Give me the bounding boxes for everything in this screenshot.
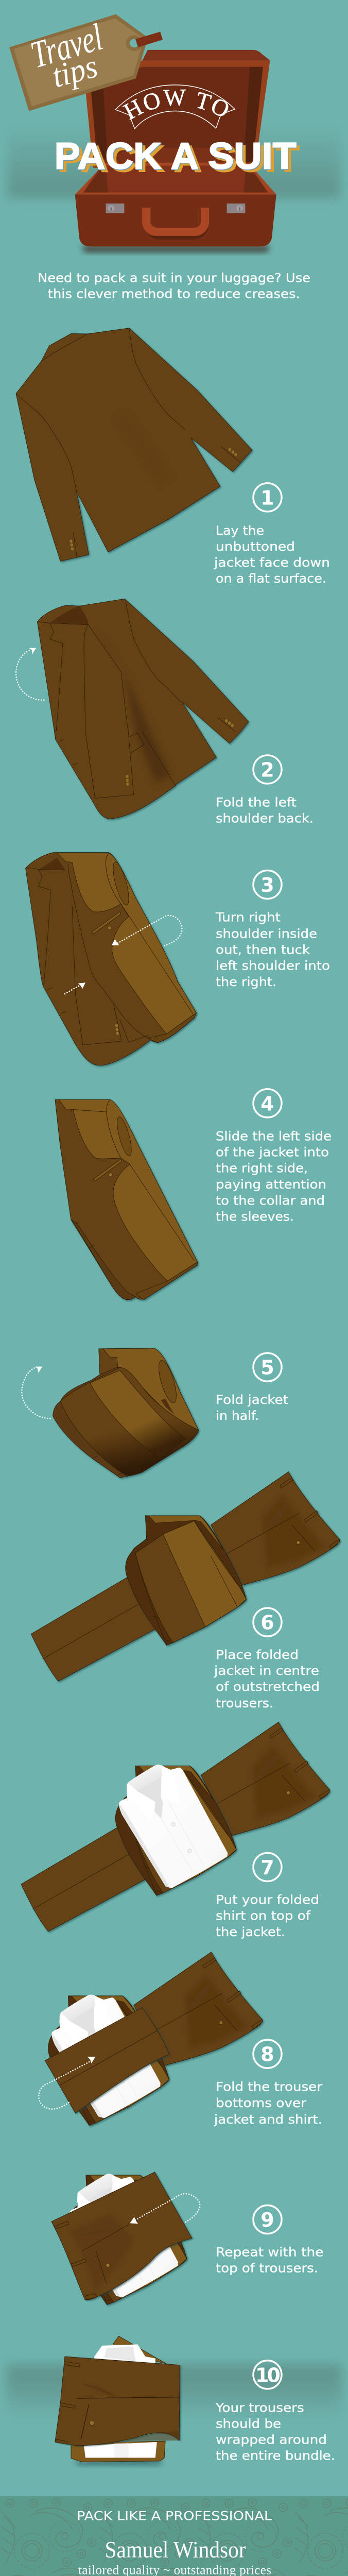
step 6 text: jacket in centre	[214, 1664, 319, 1678]
step 4 text: 4	[260, 1092, 274, 1115]
step 9 text: top of trousers.	[216, 2261, 318, 2276]
step 1 text: on a flat surface.	[216, 571, 326, 586]
step 3 text: left shoulder into	[216, 959, 330, 973]
step 10 text: Your trousers	[215, 2401, 304, 2415]
step 9 text: 9	[260, 2209, 274, 2231]
footer: Samuel Windsor	[0, 2496, 348, 2576]
step 4 text: Slide the left side	[216, 1129, 332, 1143]
banner: how to: HOW TO	[123, 90, 229, 121]
jacket step 3	[26, 853, 197, 1065]
luggage tag: travel tips: tips	[48, 47, 101, 95]
title: pack a suit: PACK A SUIT	[58, 139, 300, 180]
intro text: this clever method to reduce creases.	[48, 286, 300, 301]
step 6 text	[214, 1608, 320, 1710]
step 4 text: the sleeves.	[216, 1210, 294, 1224]
arrow: fold in half	[22, 1367, 50, 1418]
step 10 text: the entire bundle.	[216, 2449, 335, 2463]
step 6 text: of outstretched	[216, 1680, 320, 1694]
step 4 text: to the collar and	[216, 1193, 325, 1208]
step 6 text: 6	[260, 1612, 274, 1634]
step 10 text: should be	[216, 2417, 281, 2431]
icon: right latch	[227, 204, 245, 213]
step 4 text: of the jacket into	[216, 1145, 329, 1159]
trousers with jacket step 6	[31, 1472, 340, 1681]
step 5 text	[216, 1353, 288, 1423]
jacket step 2	[16, 599, 249, 819]
bundle step 10	[55, 2336, 180, 2466]
luggage tag: travel tips	[9, 14, 163, 111]
step 8 text: 8	[260, 2043, 274, 2066]
jacket step 1	[16, 328, 252, 561]
step 8 text: bottoms over	[216, 2096, 306, 2110]
step 6 text: trousers.	[216, 1696, 273, 1710]
bundle step 8	[39, 1952, 263, 2126]
arrow: fold shoulder	[16, 648, 44, 700]
step 3 text: out, then tuck	[216, 943, 310, 957]
bundle step 9	[51, 2172, 200, 2305]
step 4 text: the right side,	[216, 1161, 308, 1176]
step 7 text: shirt on top of	[216, 1909, 311, 1923]
title: pack a suit: PACK A SUIT	[55, 135, 297, 177]
step 3 text: Turn right	[215, 910, 281, 924]
step 3 text: 3	[260, 874, 274, 896]
step 7 text: Put your folded	[216, 1893, 319, 1907]
shirt	[119, 1765, 228, 1888]
step 1 text	[214, 483, 330, 586]
step 10 text: wrapped around	[216, 2433, 327, 2447]
step 3 text: shoulder inside	[216, 926, 317, 941]
step 1 text: Lay the	[216, 523, 264, 538]
arrow: top of trousers	[130, 2194, 200, 2224]
step 7 text	[216, 1853, 319, 1939]
step 2 text: 2	[260, 758, 274, 781]
intro text	[38, 271, 310, 301]
icon: left latch	[106, 204, 124, 213]
footer heading: PACK LIKE A PROFESSIONAL	[77, 2509, 272, 2523]
illustration: open suitcase	[75, 50, 276, 252]
step 1 text: 1	[260, 486, 274, 509]
step 2 text: Fold the left	[216, 795, 297, 809]
shadow band behind title	[7, 121, 341, 198]
luggage tag: travel tips: Travel	[26, 16, 107, 76]
arrow: trouser bottoms	[39, 2057, 95, 2109]
trouser flap	[45, 2008, 169, 2113]
step 5 text: 5	[260, 1357, 274, 1379]
shadow band behind step 10	[6, 2364, 342, 2420]
step 9 text	[216, 2205, 323, 2276]
arrow: left shoulder	[65, 982, 85, 994]
jacket step 4	[55, 1099, 198, 1300]
step 2 text	[216, 755, 314, 825]
step 3 text: the right.	[216, 975, 276, 989]
step 10 text: 10	[255, 2364, 280, 2386]
step 1 text: jacket face down	[214, 555, 330, 570]
step 2 text: shoulder back.	[216, 811, 314, 825]
jacket step 5	[22, 1348, 199, 1478]
brand name: Samuel Windsor	[105, 2536, 246, 2563]
step 8 text	[214, 2040, 322, 2127]
step 3 text	[215, 871, 330, 989]
trouser top flap	[51, 2172, 192, 2300]
step 4 text: paying attention	[216, 1177, 326, 1192]
step 8 text: jacket and shirt.	[214, 2112, 322, 2127]
step 5 text: Fold jacket	[216, 1393, 288, 1407]
step 1 text: unbuttoned	[216, 539, 295, 554]
step 7 text: 7	[260, 1856, 274, 1879]
arrow: right shoulder tuck	[112, 916, 182, 946]
step 6 text: Place folded	[216, 1648, 299, 1662]
trousers, jacket and shirt step 7	[21, 1722, 329, 1931]
step 7 text: the jacket.	[216, 1925, 285, 1939]
intro text: Need to pack a suit in your luggage? Use	[38, 271, 310, 285]
step 8 text: Fold the trouser	[216, 2079, 322, 2094]
step 4 text	[216, 1089, 332, 1224]
step 10 text	[215, 2361, 335, 2463]
title: pack a suit: PACK A SUIT	[55, 137, 297, 178]
icon: handle	[142, 208, 209, 240]
step 9 text: Repeat with the	[216, 2245, 323, 2260]
step 5 text: in half.	[216, 1409, 259, 1423]
